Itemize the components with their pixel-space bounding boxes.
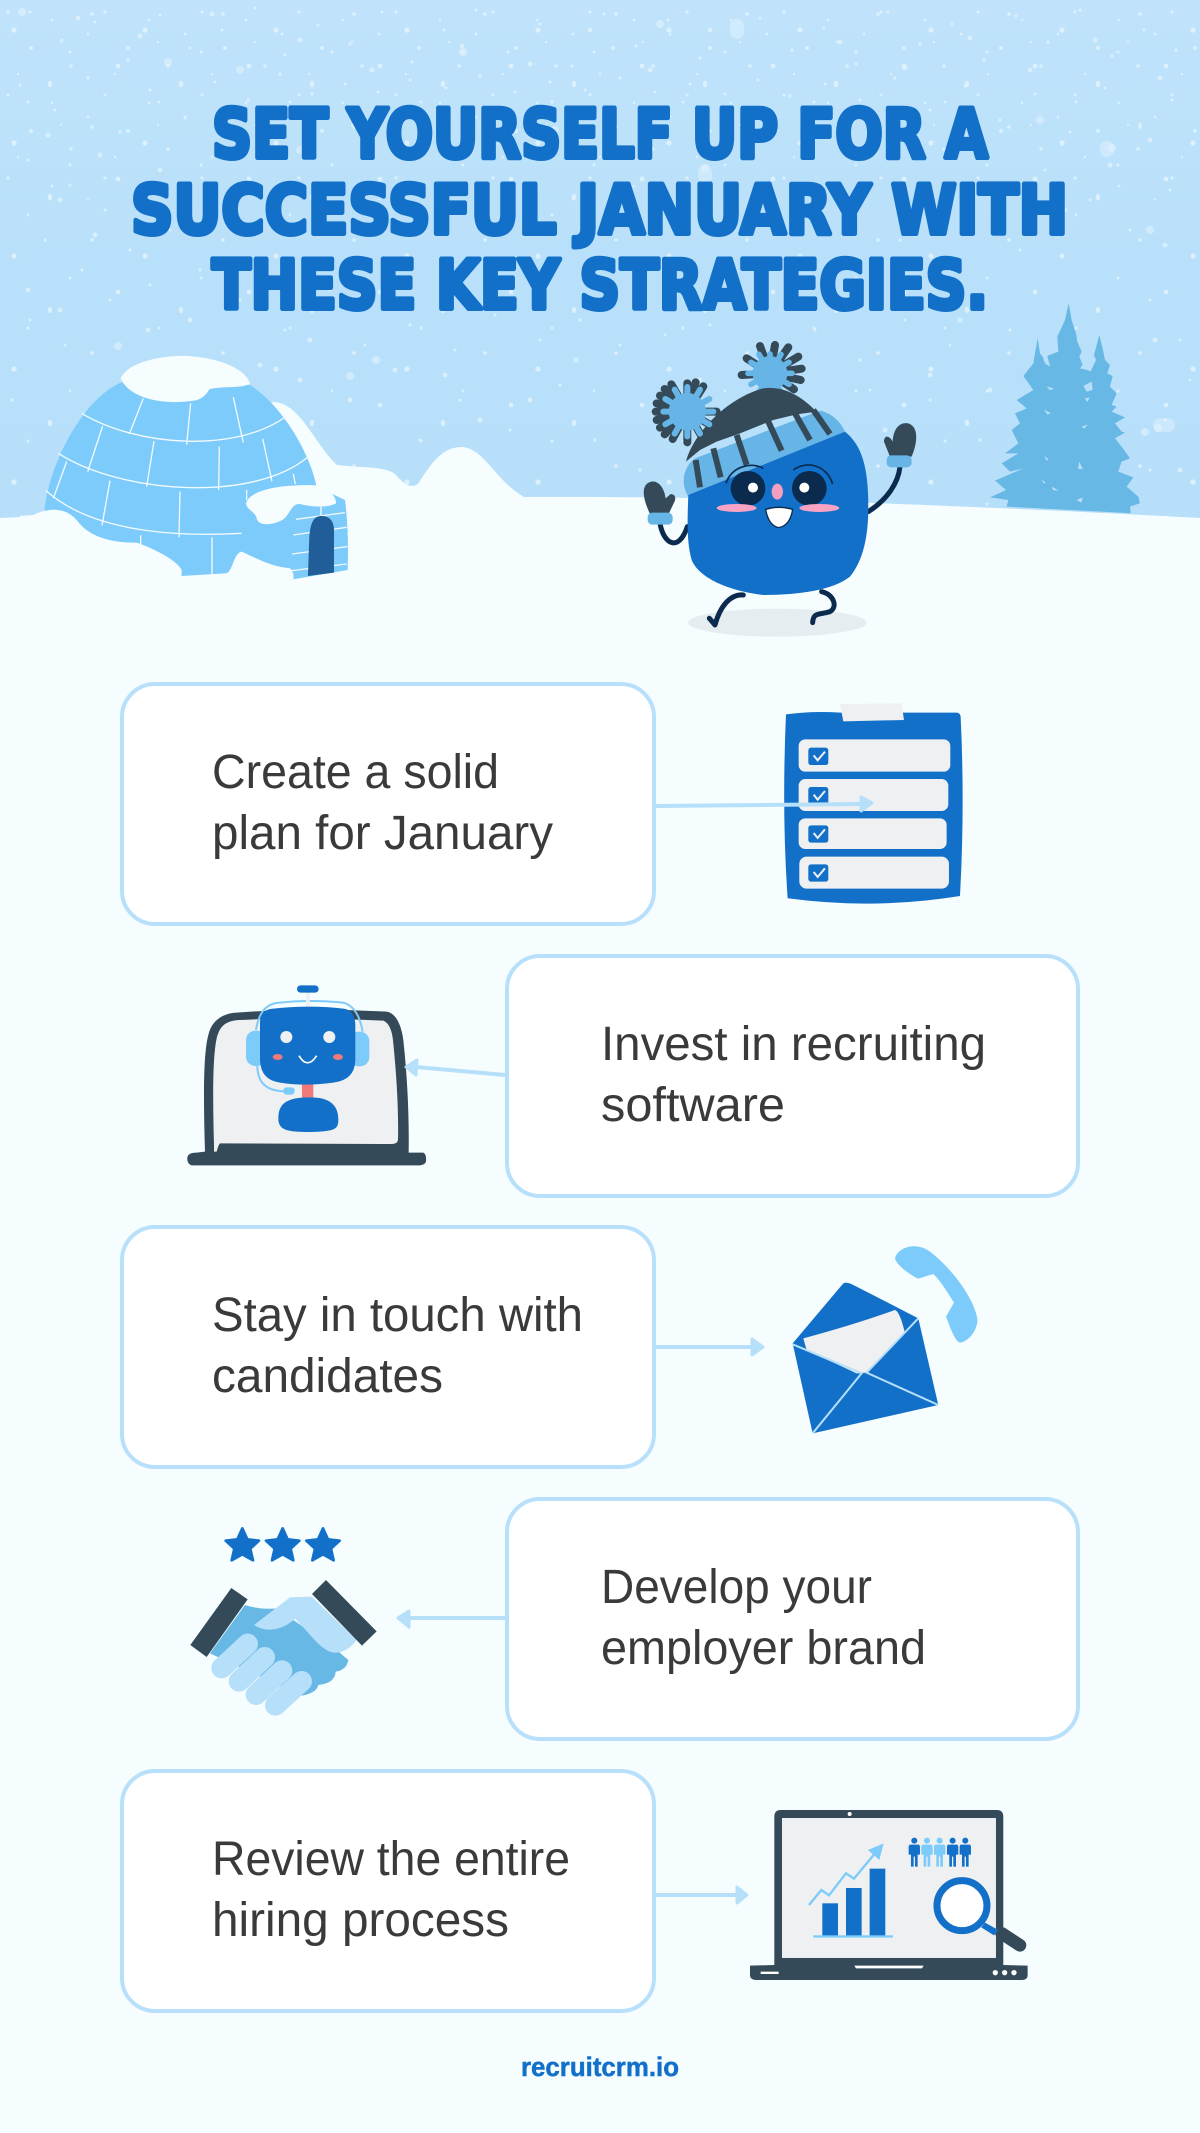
falling snow bbox=[0, 0, 1200, 520]
card 5 bbox=[122, 1771, 654, 2011]
bar chart bbox=[809, 1843, 893, 1938]
card 1 bbox=[122, 684, 654, 924]
magnifying glass bbox=[937, 1881, 1020, 1945]
arrow 2 bbox=[406, 1060, 505, 1075]
arrow 4 bbox=[398, 1611, 505, 1627]
igloo door bbox=[308, 516, 334, 576]
card 2 bbox=[507, 956, 1078, 1196]
three stars bbox=[226, 1528, 340, 1560]
footer url: recruitcrm.io bbox=[521, 2052, 679, 2082]
icon: handshake and stars bbox=[190, 1528, 377, 1705]
robot neck bbox=[302, 1083, 313, 1098]
hat stripes bbox=[696, 410, 830, 487]
cuffs bbox=[190, 1580, 377, 1657]
arrow 5 bbox=[656, 1887, 747, 1903]
igloo brick lines bbox=[46, 397, 347, 575]
mascot shadow bbox=[688, 609, 867, 637]
mascot face bbox=[717, 465, 839, 528]
card 2: software bbox=[601, 1079, 785, 1132]
icon: robot on laptop bbox=[187, 985, 426, 1165]
hat pompom front bbox=[656, 382, 717, 442]
hat top bbox=[686, 388, 832, 462]
hat band bbox=[684, 411, 845, 497]
card 5: hiring process bbox=[212, 1894, 509, 1947]
robot antenna bbox=[306, 992, 310, 1007]
robot head bbox=[260, 1007, 355, 1085]
phone handset bbox=[895, 1246, 977, 1343]
card 4: Develop your bbox=[601, 1561, 872, 1614]
title bbox=[131, 96, 1068, 326]
hat pompom back bbox=[742, 345, 802, 393]
mascot legs bbox=[709, 592, 834, 625]
people icons bbox=[909, 1838, 971, 1867]
card 3: Stay in touch with bbox=[212, 1289, 583, 1342]
card 2: Invest in recruiting bbox=[601, 1018, 986, 1071]
left mitten bbox=[644, 482, 675, 525]
igloo snow bbox=[20, 356, 336, 593]
icon: clipboard checklist bbox=[784, 703, 963, 904]
card 5: Review the entire bbox=[212, 1833, 570, 1886]
front hand bbox=[254, 1597, 357, 1653]
laptop bbox=[187, 1010, 426, 1165]
title: THESE KEY STRATEGIES. bbox=[212, 246, 988, 326]
mascot body bbox=[688, 432, 868, 595]
icon: envelope and phone bbox=[793, 1246, 977, 1433]
card 3: candidates bbox=[212, 1350, 443, 1403]
arrow 3 bbox=[656, 1339, 763, 1355]
back hand bbox=[210, 1605, 348, 1696]
card 1: Create a solid bbox=[212, 746, 499, 799]
right mitten bbox=[884, 423, 916, 467]
fingers bbox=[222, 1644, 302, 1705]
card 1: plan for January bbox=[212, 807, 553, 860]
title: SET YOURSELF UP FOR A bbox=[212, 96, 988, 174]
card 3 bbox=[122, 1227, 654, 1467]
trees bbox=[990, 303, 1140, 513]
sky background bbox=[0, 0, 1200, 560]
mascot character bbox=[644, 345, 916, 637]
mascot arms bbox=[660, 467, 900, 543]
robot torso bbox=[278, 1097, 338, 1132]
title: SUCCESSFUL JANUARY WITH bbox=[131, 172, 1068, 250]
robot headset bbox=[256, 1001, 363, 1091]
igloo bbox=[20, 356, 348, 593]
arrow 1 bbox=[656, 797, 872, 811]
card 4 bbox=[507, 1499, 1078, 1739]
icon: laptop analytics bbox=[750, 1810, 1028, 1980]
igloo dome bbox=[44, 382, 348, 579]
card 4: employer brand bbox=[601, 1622, 926, 1675]
